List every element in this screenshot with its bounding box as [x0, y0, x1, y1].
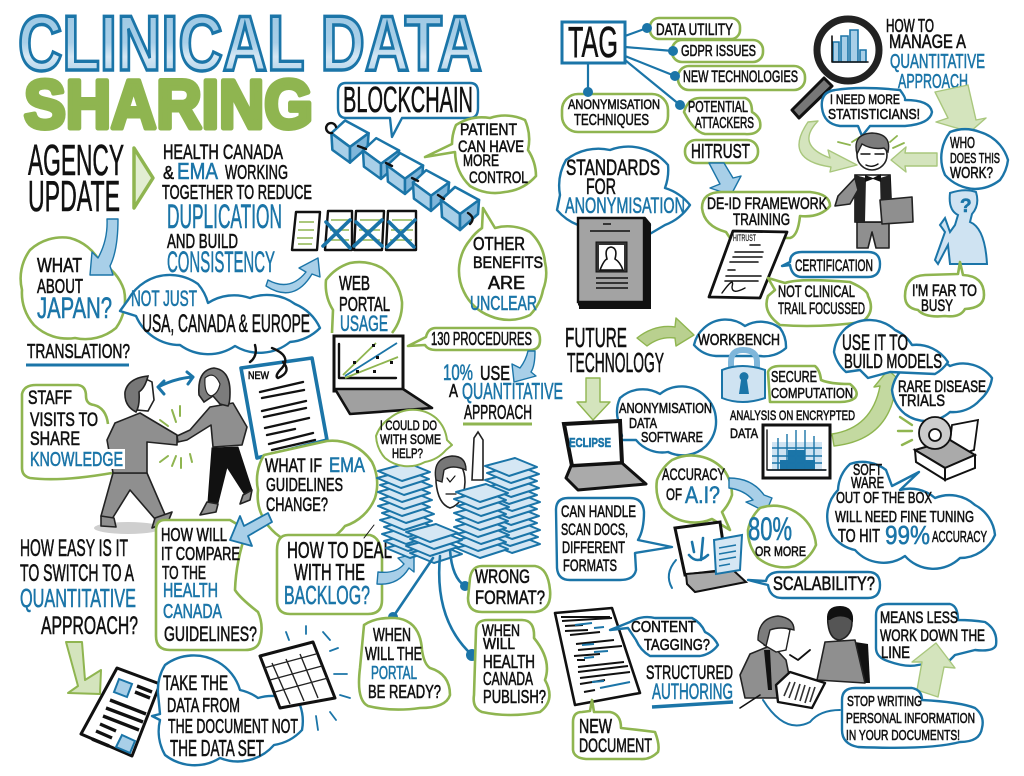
text block: 10 percent use a quantitative approach: A — [449, 381, 458, 401]
TAG connectors — [588, 28, 680, 105]
callout: I'm far to busy — [905, 262, 984, 316]
blockchain callout — [338, 79, 478, 137]
heading: Agency Update: UPDATE — [28, 172, 120, 221]
callout: 80 percent or more — [748, 506, 816, 567]
callout: when will Health Canada publish — [474, 620, 549, 715]
callout: content tagging: TAGGING? — [644, 637, 710, 654]
callout: I need more statisticians — [822, 88, 932, 136]
callout: use it to build models: USE IT TO — [842, 330, 908, 355]
arrow: green to workbench — [637, 318, 694, 346]
callout: what if EMA guidelines change: CHANGE? — [266, 495, 328, 516]
callout: can handle scan docs: DIFFERENT — [562, 538, 625, 557]
callout: staff visits: STAFF — [28, 388, 72, 409]
arrow: triangle — [134, 148, 153, 208]
callout: not clinical trail focussed — [766, 278, 871, 326]
callout: use it to build models: BUILD MODELS — [844, 351, 942, 373]
callout: other benefits: UNCLEAR — [470, 293, 537, 315]
callout: when will the portal be ready: BE READY? — [368, 682, 441, 702]
callout: means less work — [876, 604, 996, 666]
callout: not just USA Canada Europe: NOT JUST — [131, 286, 197, 311]
callout: I could do with some help: HELP? — [392, 445, 423, 461]
callout: can handle scan docs — [556, 498, 672, 580]
text block: Health Canada and EMA: DUPLICATION — [167, 198, 282, 236]
callout: rare disease trials: RARE DISEASE — [898, 377, 986, 396]
text block: Health Canada and EMA: AND BUILD — [167, 231, 238, 253]
callout: how will it compare: TO THE — [162, 563, 206, 583]
text block: how easy is it to switch: TO SWITCH TO A — [20, 560, 134, 587]
text block: analysis on encrypted data — [730, 407, 855, 441]
callout: software out of the box: SOFT — [853, 462, 882, 479]
callout: when will the portal be ready: PORTAL — [371, 663, 417, 683]
callout: software out of the box — [827, 462, 995, 569]
text block: how to manage a quantitative approach: APPROACH — [898, 71, 968, 93]
callout: patient control — [425, 116, 536, 193]
callout: staff visits: SHARE — [30, 429, 80, 450]
callout: What about Japan — [21, 237, 125, 339]
text block: structured authoring: STRUCTURED — [646, 663, 733, 684]
callout: take the data from the document: DATA FROM — [167, 695, 240, 717]
callout: how to deal with the backlog — [277, 535, 392, 614]
callout: web portal usage: WEB — [339, 273, 370, 295]
text block: how easy is it to switch — [20, 535, 138, 640]
text block: 10 percent use a quantitative approach: USE — [480, 363, 510, 385]
arrow: blue to How will — [230, 513, 272, 546]
icon: scanner laptop with document — [669, 522, 746, 592]
icon: new guidelines document with clip — [241, 345, 327, 458]
callout: software out of the box: WILL NEED FINE TUNING — [835, 509, 974, 526]
callout: patient control: PATIENT — [460, 120, 517, 139]
callout: data utility — [650, 18, 740, 39]
callout: when will Health Canada publish: CANADA — [483, 669, 533, 689]
callout: web portal usage: PORTAL — [339, 294, 390, 316]
callout: anonymisation techniques: ANONYMISATION — [568, 96, 660, 112]
callout: when will the portal be ready: WILL THE — [365, 644, 422, 664]
TAG box: TAG — [568, 18, 618, 67]
callout: patient control: MORE — [463, 151, 499, 170]
text block: Health Canada and EMA: EMA — [177, 158, 219, 184]
callout: standards for anonymisation: FOR — [586, 174, 616, 199]
callout: anonymisation data software: SOFTWARE — [641, 429, 703, 446]
heading: future technology: FUTURE — [565, 322, 627, 353]
callout: accuracy of AI: A.I? — [685, 482, 720, 509]
callout: new technologies — [678, 66, 805, 90]
callout: when will Health Canada publish: PUBLISH? — [483, 687, 546, 707]
callout: staff visits — [22, 385, 125, 479]
text: TECHNOLOGY — [567, 347, 664, 378]
callout: means less work: LINE — [881, 643, 910, 662]
text block: 10 percent use a quantitative approach: APPROACH — [464, 402, 532, 424]
text block: analysis on encrypted data: DATA — [730, 425, 759, 441]
callout: I could do with some help: I COULD DO — [380, 417, 437, 433]
callout: anonymisation data software: ANONYMISATION — [619, 400, 712, 417]
callout: software out of the box: OUT OF THE BOX — [836, 490, 932, 507]
callout: when will Health Canada publish: WILL — [483, 636, 515, 653]
callout: I'm far to busy: BUSY — [921, 296, 953, 315]
illustration: two people reviewing document — [740, 606, 870, 726]
callout: stop writing personal information: IN YOUR DOCUMENTS! — [846, 727, 960, 744]
icon: padlock — [722, 350, 765, 402]
callout: other benefits: BENEFITS — [473, 253, 543, 272]
icon: hitrust certificate — [709, 231, 787, 298]
callout: new document: NEW — [579, 716, 612, 738]
callout: hitrust: HITRUST — [691, 141, 750, 163]
callout: who does this work — [941, 129, 1008, 189]
arrow: green down to document — [66, 642, 101, 694]
callout: workbench — [694, 320, 786, 356]
callout: scalability: SCALABILITY? — [773, 574, 875, 595]
callout: web portal usage: USAGE — [340, 311, 388, 336]
callout: wrong format: WRONG — [475, 567, 530, 588]
icon: software box with disc — [898, 417, 978, 480]
callout: anonymisation data software: DATA — [629, 415, 657, 432]
callout: who does this work: WHO — [950, 135, 975, 152]
label: Translation: TRANSLATION? — [27, 341, 130, 363]
arrow: curved green to models — [832, 370, 904, 446]
text block: structured authoring — [646, 663, 733, 707]
title: Sharing: SHARING — [24, 66, 313, 143]
callout: who does this work: WORK? — [950, 165, 993, 182]
callout: de-id framework training: TRAINING — [733, 210, 790, 229]
callout: when will the portal be ready — [359, 618, 450, 710]
callout: how will it compare: GUIDELINES? — [164, 623, 257, 646]
text block: Health Canada and EMA: WORKING — [225, 162, 288, 184]
arrow: green up to less work — [912, 643, 955, 697]
callout: I could do with some help — [376, 410, 452, 466]
icon: new guidelines document with clip: NEW — [248, 370, 269, 382]
callout: rare disease trials — [892, 359, 992, 421]
text block: Health Canada and EMA: & — [163, 163, 174, 183]
callout: What about Japan: WHAT — [37, 255, 82, 277]
callout: secure computation: SECURE — [771, 369, 817, 386]
callout: use it to build models — [834, 320, 948, 378]
heading: Agency Update — [28, 136, 124, 221]
callout: what if EMA guidelines change: GUIDELINES — [266, 475, 343, 495]
callout: secure computation: COMPUTATION — [771, 385, 853, 402]
callout: means less work: MEANS LESS — [880, 608, 958, 627]
callout: wrong format — [468, 566, 550, 612]
callout: how will it compare: HOW WILL — [161, 525, 227, 545]
illustration: woman shaking hands — [160, 368, 252, 515]
callout: when will Health Canada publish: HEALTH — [483, 652, 535, 672]
callout: anonymisation techniques — [562, 94, 668, 132]
illustration: blue person with question — [935, 190, 987, 264]
text block: structured authoring: AUTHORING — [652, 679, 733, 704]
icon: standards book — [578, 218, 650, 308]
callout: new technologies: NEW TECHNOLOGIES — [683, 67, 798, 86]
text block: Health Canada and EMA: CONSISTENCY — [167, 246, 275, 279]
callout: data utility: DATA UTILITY — [656, 20, 733, 39]
callout: potential attackers — [684, 98, 760, 134]
callout: 80 percent or more: OR MORE — [755, 543, 806, 559]
text block: 10 percent use a quantitative approach — [443, 360, 563, 424]
heading: future technology — [565, 322, 664, 378]
callout: 80 percent or more: 80% — [748, 511, 792, 547]
text block: Health Canada and EMA: TOGETHER TO REDUCE — [162, 182, 312, 204]
callout: how will it compare: CANADA — [163, 601, 222, 623]
callout: 130 procedures: 130 PROCEDURES — [431, 329, 532, 349]
callout: content tagging — [610, 617, 718, 656]
icon: laptop with line chart — [334, 336, 432, 414]
callout: how will it compare: HEALTH — [163, 580, 218, 602]
callout: I need more statisticians: I NEED MORE — [830, 91, 900, 107]
icon: crossed out documents — [292, 211, 416, 250]
callout: 130 procedures — [408, 328, 540, 350]
callout: how will it compare: IT COMPARE — [161, 544, 240, 564]
heading: Agency Update: AGENCY — [28, 136, 124, 185]
icon: new structured document — [555, 608, 640, 705]
callout: software out of the box: TO HIT — [838, 526, 880, 546]
icon: grid data set — [260, 626, 350, 730]
arrow: hitrust to de-id — [709, 163, 741, 195]
callout: software out of the box: ACCURACY — [932, 529, 987, 546]
arrow: curved blue to documents — [266, 258, 320, 293]
text block: how to manage a quantitative approach: MANAGE A — [889, 32, 966, 53]
callout: staff visits: KNOWLEDGE — [30, 449, 123, 471]
arrow: green curved to person — [799, 121, 857, 172]
text block: how to manage a quantitative approach: HOW TO — [886, 16, 934, 36]
callout: web portal usage — [326, 262, 402, 336]
illustration: person under paper stacks — [364, 432, 540, 661]
callout: stop writing personal information: STOP WRITING — [847, 693, 922, 710]
arrow: green from who does this work to person — [891, 147, 937, 172]
callout: accuracy of AI: OF — [666, 485, 682, 504]
callout: how to deal with the backlog: BACKLOG? — [284, 580, 370, 610]
callout: staff visits: VISITS TO — [30, 410, 98, 431]
callout: what if EMA guidelines change: WHAT IF — [265, 456, 322, 477]
callout: scalability — [748, 572, 880, 598]
callout: take the data from the document: THE DOCUMENT NOT — [168, 716, 298, 738]
callout: anonymisation data software — [617, 386, 716, 455]
callout: what if EMA guidelines change: EMA — [329, 454, 365, 477]
callout: standards for anonymisation: ANONYMISATION — [565, 193, 685, 218]
callout: not just USA Canada Europe — [120, 275, 320, 354]
callout: GDPR issues — [672, 40, 763, 62]
callout: workbench: WORKBENCH — [698, 332, 780, 349]
callout: wrong format: FORMAT? — [475, 588, 545, 609]
callout: certification — [782, 252, 880, 277]
callout: other benefits: ARE — [488, 273, 525, 293]
text block: Health Canada and EMA: HEALTH CANADA — [163, 141, 283, 164]
text block: how easy is it to switch: QUANTITATIVE — [20, 583, 136, 613]
arrow: double headed exchange — [158, 372, 193, 394]
callout: rare disease trials: TRIALS — [899, 391, 945, 410]
arrow: down to Japan — [90, 219, 118, 275]
callout: patient control: CAN HAVE — [458, 137, 524, 156]
callout: can handle scan docs: FORMATS — [563, 556, 617, 575]
callout: potential attackers: POTENTIAL — [688, 99, 748, 116]
text block: 10 percent use a quantitative approach: QUANTITATIVE — [462, 378, 563, 404]
callout: new document — [573, 700, 659, 759]
callout: take the data from the document: THE DATA SET — [170, 735, 264, 761]
arrow: blue to backlog pile — [377, 554, 414, 584]
callout: potential attackers: ATTACKERS — [695, 115, 754, 132]
callout: standards for anonymisation — [557, 147, 690, 235]
callout: how to deal with the backlog: WITH THE — [294, 559, 365, 585]
callout: not just USA Canada Europe: USA, CANADA & EUROPE — [142, 310, 310, 338]
callout: when will Health Canada publish: WHEN — [482, 621, 520, 640]
callout: patient control: CONTROL — [469, 168, 528, 187]
text block: 10 percent use a quantitative approach: 10% — [443, 360, 473, 385]
callout: hitrust — [685, 140, 758, 163]
arrow: green to who does this work — [935, 85, 986, 132]
callout: I could do with some help: WITH SOME — [380, 431, 441, 447]
blockchain callout: BLOCKCHAIN — [343, 79, 473, 120]
callout: anonymisation techniques: TECHNIQUES — [574, 112, 649, 129]
TAG connector dots — [583, 23, 685, 110]
callout: how to deal with the backlog: HOW TO DEAL — [287, 537, 392, 563]
callout: secure computation — [768, 366, 857, 402]
callout: software out of the box: WARE — [851, 475, 884, 492]
arrow: green down to laptop — [577, 378, 610, 420]
callout: how will it compare — [156, 520, 262, 650]
icon: magnifier with bar chart — [792, 19, 879, 118]
TAG box — [562, 18, 625, 67]
callout: take the data from the document: TAKE THE — [163, 672, 228, 695]
callout: not clinical trail focussed: TRAIL FOCUSSED — [778, 299, 865, 318]
callout: software out of the box: 99% — [885, 520, 930, 550]
callout: I'm far to busy: I'M FAR TO — [912, 281, 977, 300]
text block: Health Canada and EMA — [162, 141, 312, 279]
callout: other benefits: OTHER — [473, 234, 525, 254]
label: Translation — [26, 341, 130, 365]
icon: hitrust certificate: HITRUST — [733, 233, 756, 243]
callout: GDPR issues: GDPR ISSUES — [681, 43, 756, 60]
text block: how easy is it to switch: APPROACH? — [41, 612, 138, 640]
arrow: blue to 80 percent — [729, 478, 772, 512]
callout: content tagging: CONTENT — [631, 619, 696, 636]
callout: when will the portal be ready: WHEN — [373, 625, 411, 645]
callout: What about Japan: ABOUT — [37, 276, 83, 298]
illustration: man shaking hands — [94, 376, 177, 534]
callout: certification: CERTIFICATION — [795, 256, 873, 275]
chart: encrypted data histogram — [763, 425, 830, 478]
callout: can handle scan docs: SCAN DOCS, — [561, 520, 628, 539]
callout: can handle scan docs: CAN HANDLE — [561, 502, 636, 521]
callout: other benefits — [459, 208, 546, 320]
icon: Eclipse laptop — [564, 421, 646, 490]
text block: how to manage a quantitative approach — [886, 16, 985, 93]
callout: de-id framework training: DE-ID FRAMEWORK — [707, 194, 827, 213]
icon: chain of blocks — [326, 120, 479, 230]
callout: What about Japan: JAPAN? — [37, 292, 112, 325]
callout: not clinical trail focussed: NOT CLINICAL — [778, 282, 855, 301]
illustration: man with bow tie — [835, 133, 913, 248]
callout: stop writing personal information — [842, 688, 983, 748]
icon: data document — [81, 668, 160, 756]
arrow: blue down to 10 percent — [512, 351, 536, 382]
callout: accuracy of AI: ACCURACY — [662, 465, 725, 484]
illustration: blue person with question: ? — [960, 196, 972, 217]
callout: de-id framework training — [702, 192, 830, 238]
text block: how easy is it to switch: HOW EASY IS IT — [20, 535, 128, 562]
text block: analysis on encrypted data: ANALYSIS ON ENCRYPTED — [730, 407, 855, 423]
callout: standards for anonymisation: STANDARDS — [566, 155, 660, 180]
callout: new document: DOCUMENT — [579, 736, 652, 757]
callout: take the data from the document — [152, 655, 303, 765]
title: Clinical Data: CLINICAL DATA — [18, 0, 482, 87]
icon: Eclipse laptop: ECLIPSE — [569, 435, 611, 450]
callout: I need more statisticians: STATISTICIANS! — [828, 106, 920, 123]
callout: accuracy of AI — [656, 456, 732, 530]
callout: what if EMA guidelines change — [257, 441, 377, 545]
